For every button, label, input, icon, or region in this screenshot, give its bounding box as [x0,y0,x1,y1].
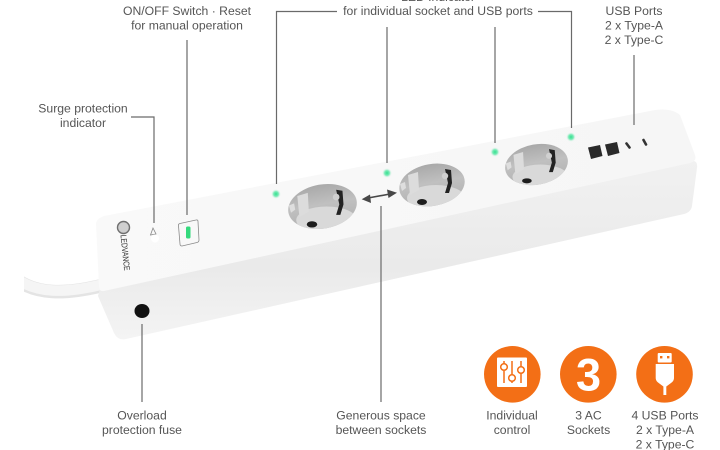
label: surge: Surge protection [38,102,128,116]
label: usb ports: 2 x Type-C [605,33,664,47]
leader: switch [186,40,188,215]
socket 3 [505,144,568,186]
leader: usb [633,55,635,125]
leader: space [380,206,382,402]
caption: sockets: Sockets [567,423,610,437]
leader: led 3 [494,27,496,143]
overload fuse button [134,304,150,318]
label: switch: for manual operation [131,18,243,32]
power cable [20,281,100,292]
icon: individual control [484,346,541,403]
socket 1 [288,184,357,229]
brand logo: LEDVANCE [119,234,132,271]
label: individual ports: for individual socket and USB ports [343,4,533,18]
icon: usb [636,346,693,403]
caption: usb: 4 USB Ports [631,408,699,422]
caption: control: control [494,423,530,437]
label: surge: indicator [60,116,106,130]
leader: led 2 [386,27,388,163]
icon: three sockets [560,346,617,403]
label: fuse: protection fuse [102,423,182,437]
power strip body [96,110,697,339]
label: space: between sockets [336,423,426,437]
label: switch: ON/OFF Switch · Reset [123,4,251,18]
caption: control: Individual [486,408,538,422]
USB-C ports [626,140,646,148]
label: usb ports: USB Ports [606,4,662,18]
leader: fuse [141,324,143,402]
LED indicators [271,132,576,199]
leader: led 4 [538,12,572,128]
surge indicator [150,228,159,242]
double arrow [362,190,397,203]
leader: led 1 [276,12,337,184]
label: space: Generous space [336,408,426,422]
socket 2 [399,164,465,206]
leader: surge [131,117,154,223]
USB-A ports [588,142,620,159]
label: fuse: Overload [117,408,167,422]
caption: usb: 2 x Type-A [636,423,695,437]
icon: three sockets: 3 [576,350,601,400]
label: usb ports: 2 x Type-A [605,18,664,32]
top face [96,110,695,291]
caption: sockets: 3 AC [575,408,602,422]
front face [98,161,697,339]
brand logo [118,222,132,271]
on/off switch [178,220,199,246]
